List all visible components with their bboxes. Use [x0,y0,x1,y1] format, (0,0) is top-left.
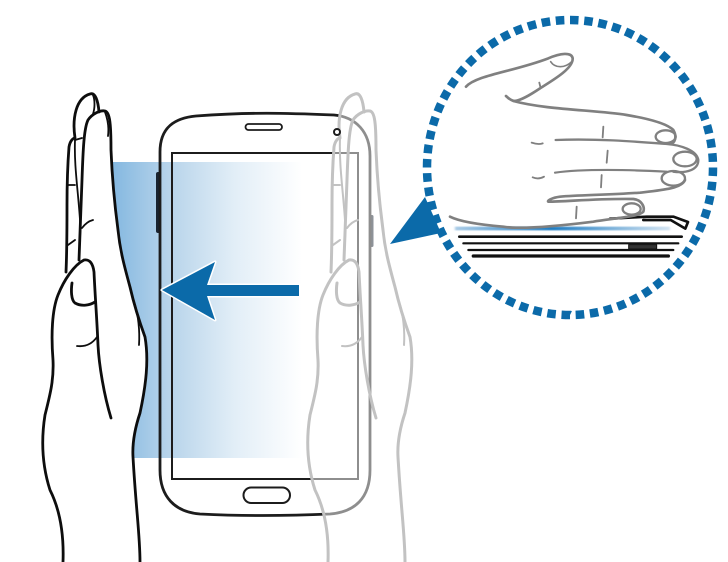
hand fill [43,94,147,562]
thumb nail [71,283,95,305]
left hand: start position [43,94,147,562]
ghost hand: end position [308,94,412,562]
phone speaker [246,124,282,130]
blue sweep gradient [110,162,302,458]
back fingers [66,94,99,272]
palm edge [79,111,147,562]
close-up: hand above phone [450,54,698,256]
phone home button [244,488,290,503]
creases [135,305,139,345]
phone camera [334,129,340,135]
callout pointer [390,197,441,244]
phone side buttons [156,172,374,247]
swipe arrow [162,262,299,320]
zoom circle: white disc and dotted ring [427,20,713,315]
close-up hand [450,54,698,228]
wrist and thumb [43,260,111,562]
proximity glow [455,227,670,230]
phone [156,113,374,516]
close-up phone edge [459,217,688,256]
phone body [160,113,370,516]
phone screen [172,153,358,479]
